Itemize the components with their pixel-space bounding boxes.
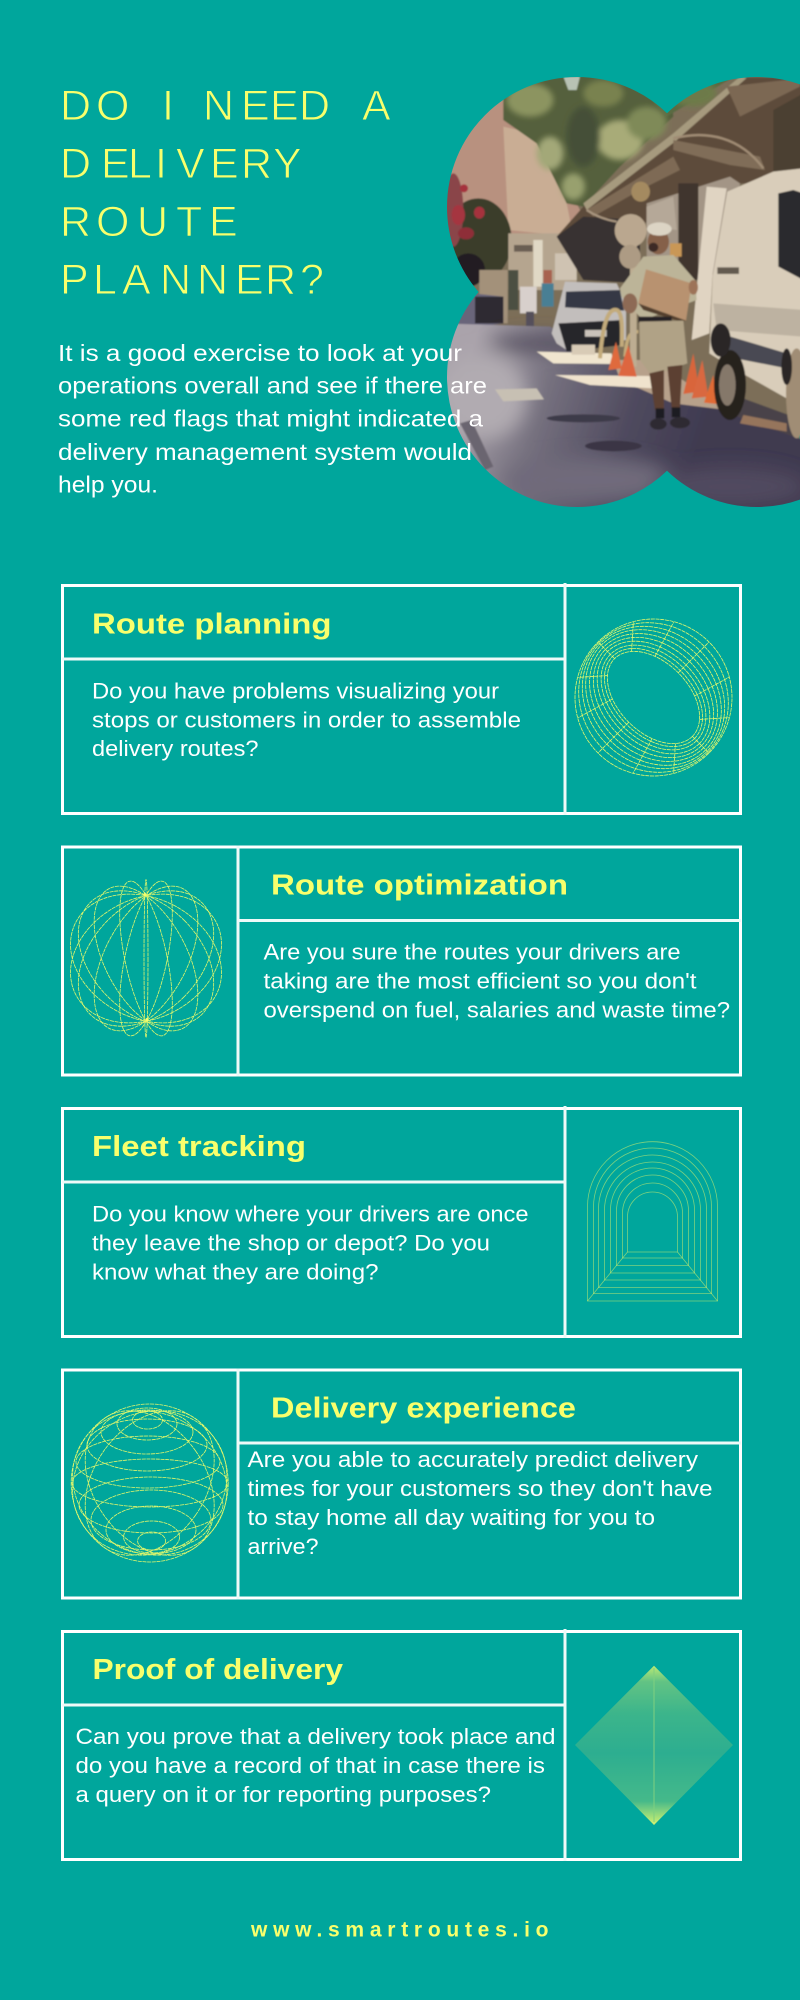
- text: fleet tracking: know what they are doing?: [92, 1260, 378, 1284]
- title: DO I NEED A: [60, 82, 391, 130]
- intro text: It is a good exercise to look at your: [58, 340, 462, 366]
- icon: wireframe tunnel: [588, 1142, 718, 1301]
- delivery man: [647, 234, 670, 255]
- title: PLANNER?: [60, 256, 324, 304]
- heading: proof of delivery: Proof of delivery: [92, 1654, 343, 1686]
- text: delivery experience: times for your customers so they don't have: [248, 1476, 712, 1501]
- text: route planning: stops or customers in order to assemble: [92, 708, 521, 732]
- text: delivery experience: [248, 1447, 712, 1559]
- text: proof of delivery: [76, 1724, 556, 1807]
- website url: www.smartroutes.io: [250, 1918, 548, 1942]
- text: fleet tracking: [92, 1202, 528, 1284]
- sun patches: [613, 360, 727, 410]
- intro text: help you.: [58, 472, 158, 498]
- heading: route planning: Route planning: [92, 608, 332, 640]
- text: route optimization: taking are the most efficient so you don't: [264, 968, 696, 994]
- heading: route optimization: Route optimization: [271, 870, 568, 902]
- title: [60, 82, 391, 304]
- van: [692, 187, 727, 340]
- intro text: some red flags that might indicated a: [58, 406, 483, 432]
- panel: proof of delivery: [62, 1629, 740, 1861]
- photo: delivery man on a street in a clover shape: [440, 70, 800, 523]
- parked car: [552, 282, 626, 350]
- intro text: [58, 340, 487, 498]
- heading: delivery experience: Delivery experience: [271, 1392, 576, 1424]
- text: delivery experience: to stay home all day waiting for you to: [248, 1505, 655, 1530]
- text: proof of delivery: do you have a record of that in case there is: [76, 1753, 545, 1778]
- panel: route optimization: [48, 846, 741, 1076]
- text: route planning: [92, 678, 521, 761]
- panel: route planning: [62, 583, 765, 815]
- traffic cones: [608, 342, 622, 370]
- heading: fleet tracking: Fleet tracking: [92, 1131, 306, 1163]
- building and tree backdrop: [451, 77, 730, 234]
- text: delivery experience: arrive?: [248, 1534, 318, 1559]
- text: route planning: Do you have problems visualizing your: [92, 678, 499, 704]
- intro text: delivery management system would: [58, 439, 472, 465]
- road: [440, 323, 800, 523]
- text: route optimization: Are you sure the routes your drivers are: [264, 940, 680, 964]
- text: route optimization: [264, 940, 730, 1022]
- intro text: operations overall and see if there are: [58, 372, 487, 398]
- red flower bush: [443, 173, 512, 287]
- distant street: [508, 233, 577, 290]
- icon: wireframe diamond: [575, 1666, 733, 1825]
- icon: wireframe torus: [542, 586, 765, 809]
- text: delivery experience: Are you able to accurately predict delivery: [248, 1447, 698, 1472]
- text: proof of delivery: a query on it or for reporting purposes?: [76, 1782, 491, 1807]
- icon: wireframe globe: [47, 1384, 252, 1582]
- text: fleet tracking: they leave the shop or depot? Do you: [92, 1230, 490, 1256]
- text: proof of delivery: Can you prove that a delivery took place and: [76, 1724, 556, 1749]
- text: route planning: delivery routes?: [92, 736, 258, 761]
- title: ROUTE: [60, 198, 238, 246]
- text: route optimization: overspend on fuel, salaries and waste time?: [264, 998, 730, 1022]
- icon: wireframe sphere with meridians: [48, 864, 244, 1053]
- panel: delivery experience: [47, 1368, 741, 1600]
- text: fleet tracking: Do you know where your drivers are once: [92, 1202, 528, 1226]
- panel: fleet tracking: [62, 1106, 740, 1338]
- title: DELIVERY: [60, 140, 302, 188]
- roof and arcade: [557, 77, 800, 237]
